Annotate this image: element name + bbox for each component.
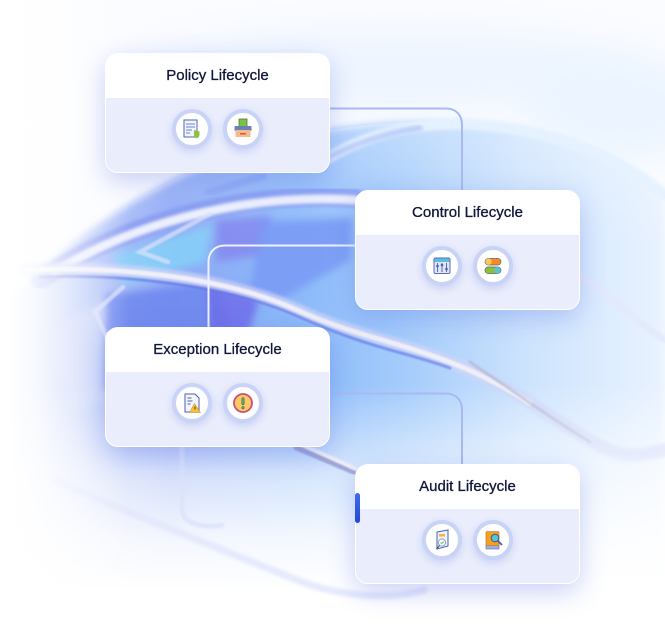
chevrons [208, 176, 263, 193]
panel: policy lifecycle [105, 53, 330, 173]
icon: book with magnifier [473, 520, 513, 560]
heading: audit lifecycle [356, 465, 579, 509]
heading: exception lifecycle: Exception Lifecycle [153, 341, 282, 358]
heading: exception lifecycle [106, 328, 329, 372]
panel: control lifecycle [355, 190, 580, 310]
upper arc [40, 197, 355, 280]
icon: toggles [473, 246, 513, 286]
heading: audit lifecycle: Audit Lifecycle [419, 478, 516, 495]
connector: control to exception [208, 246, 360, 332]
connector: policy to control [325, 108, 462, 195]
icon: document with shield [172, 109, 212, 149]
heading: policy lifecycle: Policy Lifecycle [166, 67, 269, 84]
heading: policy lifecycle [106, 54, 329, 98]
icon: archive box [223, 109, 263, 149]
icon: audit document with magnifier [422, 520, 462, 560]
main diagonal arc [25, 269, 665, 455]
heading: control lifecycle [356, 191, 579, 235]
panel: audit lifecycle [355, 464, 580, 584]
heading: control lifecycle: Control Lifecycle [412, 204, 523, 221]
icon: document with warning [172, 383, 212, 423]
icon: sliders window [422, 246, 462, 286]
active marker on audit card [355, 493, 360, 523]
connector: exception to audit [325, 394, 462, 470]
lower ribbons [55, 444, 424, 596]
icon: exclamation circle [223, 383, 263, 423]
panel: exception lifecycle [105, 327, 330, 447]
